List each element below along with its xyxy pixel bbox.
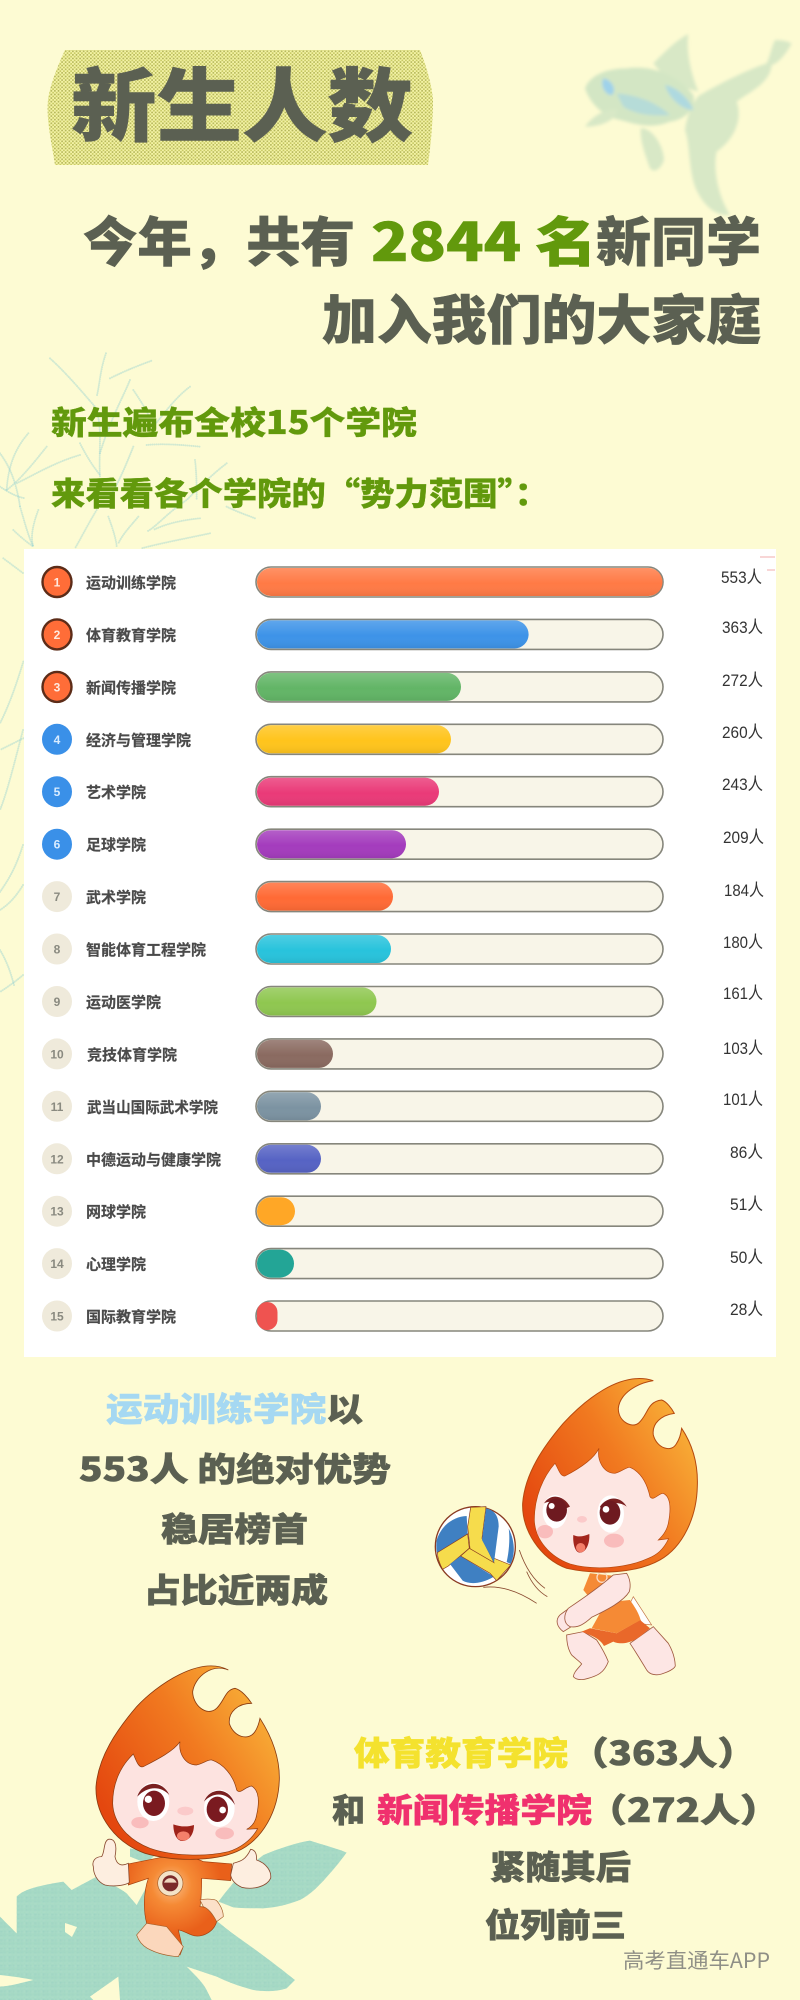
row 3: 新闻传播学院 272人: 3 xyxy=(54,680,61,694)
row 5: 艺术学院 243人: 243人 xyxy=(722,775,763,794)
row 15: 国际教育学院 28人 xyxy=(42,1300,763,1332)
white side stripe xyxy=(630,1597,652,1625)
row 4: 经济与管理学院 260人: 260人 xyxy=(722,723,763,742)
callout line: 和 新闻传播学院（272人） xyxy=(332,1784,780,1832)
row 9: 运动医学院 161人: 9 xyxy=(54,995,61,1009)
row 1: 运动训练学院 553人 xyxy=(42,567,762,597)
row 13: 网球学院 51人: 13 xyxy=(50,1205,64,1219)
row 13: 网球学院 51人 xyxy=(42,1195,763,1227)
arms xyxy=(557,1573,630,1632)
callout line: 占比近两成: 占比近两成 xyxy=(144,1564,328,1612)
row 10: 竞技体育学院 103人: 10 xyxy=(50,1047,64,1061)
row 12: 中德运动与健康学院 86人: 86人 xyxy=(730,1143,763,1162)
row 15: 国际教育学院 28人: 28人 xyxy=(730,1300,763,1319)
decoration: goldfish xyxy=(585,34,792,215)
row 9: 运动医学院 161人: 161人 xyxy=(723,984,763,1003)
row 4: 经济与管理学院 260人: 经济与管理学院 xyxy=(86,729,191,750)
row 11: 武当山国际武术学院 101人: 101人 xyxy=(723,1090,763,1109)
mascot: thumbs-up flame xyxy=(93,1666,279,1957)
row 12: 中德运动与健康学院 86人 xyxy=(42,1143,763,1174)
row 4: 经济与管理学院 260人: 4 xyxy=(54,733,61,747)
callout line: 稳居榜首: 稳居榜首 xyxy=(161,1503,308,1551)
callout line: 和 新闻传播学院（272人）: 新闻传播学院 xyxy=(377,1784,592,1832)
headline line 1: 新同学 xyxy=(596,201,761,277)
row 1: 运动训练学院 553人: 553人 xyxy=(721,568,762,587)
row 3: 新闻传播学院 272人: 272人 xyxy=(722,671,763,690)
row 13: 网球学院 51人: 网球学院 xyxy=(86,1201,146,1222)
row 3: 新闻传播学院 272人 xyxy=(42,671,763,702)
face xyxy=(537,1495,627,1553)
row 8: 智能体育工程学院 180人: 180人 xyxy=(723,933,763,952)
subheading 1: 新生遍布全校15个学院 xyxy=(51,398,417,444)
feet xyxy=(137,1923,183,1957)
callout line: 体育教育学院（363人）: 体育教育学院 xyxy=(354,1727,568,1775)
badge xyxy=(158,1871,183,1896)
row 10: 竞技体育学院 103人: 103人 xyxy=(723,1039,763,1058)
row 14: 心理学院 50人 xyxy=(42,1248,763,1279)
row 2: 体育教育学院 363人 xyxy=(42,618,763,649)
hands xyxy=(93,1839,129,1886)
panel: college ranking chart xyxy=(24,549,776,1357)
row 14: 心理学院 50人: 14 xyxy=(50,1257,64,1271)
row 12: 中德运动与健康学院 86人: 中德运动与健康学院 xyxy=(86,1149,221,1170)
callout line: 体育教育学院（363人） xyxy=(354,1727,756,1775)
heading text: 新生人数 xyxy=(71,43,413,159)
row 5: 艺术学院 243人 xyxy=(42,775,763,807)
row 10: 竞技体育学院 103人 xyxy=(42,1038,763,1069)
leaf notch xyxy=(65,1923,77,1937)
callout text: 运动训练学院 xyxy=(79,1383,391,1612)
headline line 2: 加入我们的大家庭 xyxy=(322,279,761,355)
row 7: 武术学院 184人: 武术学院 xyxy=(86,887,146,908)
row 10: 竞技体育学院 103人: 竞技体育学院 xyxy=(87,1044,177,1065)
callout line: 和 新闻传播学院（272人）: （272人） xyxy=(587,1784,780,1832)
face xyxy=(131,1782,235,1841)
row 9: 运动医学院 161人: 运动医学院 xyxy=(86,992,161,1012)
row 6: 足球学院 209人: 209人 xyxy=(723,828,764,847)
leaf decoration behind mascot xyxy=(0,1841,347,2000)
row 2: 体育教育学院 363人: 体育教育学院 xyxy=(86,624,176,645)
volleyball xyxy=(435,1507,515,1587)
row 15: 国际教育学院 28人: 国际教育学院 xyxy=(86,1306,176,1327)
callout text: 体育教育学院 and 新闻传播学院 xyxy=(332,1727,780,1947)
row 2: 体育教育学院 363人: 2 xyxy=(54,628,61,642)
headline line 1 xyxy=(83,201,761,277)
row 7: 武术学院 184人: 7 xyxy=(54,890,61,904)
row 9: 运动医学院 161人 xyxy=(42,984,763,1017)
callout line: 紧随其后: 紧随其后 xyxy=(490,1841,631,1889)
row 11: 武当山国际武术学院 101人 xyxy=(42,1090,763,1122)
callout line: 553人: 553人 的绝对优势 xyxy=(79,1443,391,1491)
row 11: 武当山国际武术学院 101人: 武当山国际武术学院 xyxy=(87,1096,218,1117)
decoration: bamboo leaves lower xyxy=(0,730,23,992)
row 6: 足球学院 209人: 6 xyxy=(54,838,61,852)
row 11: 武当山国际武术学院 101人: 11 xyxy=(51,1100,64,1114)
row 8: 智能体育工程学院 180人: 智能体育工程学院 xyxy=(86,939,206,960)
callout line: 体育教育学院（363人）: （363人） xyxy=(570,1727,756,1775)
legs xyxy=(567,1627,675,1680)
headline line 1: 今年，共有 xyxy=(83,201,355,277)
row 13: 网球学院 51人: 51人 xyxy=(730,1195,763,1214)
row 14: 心理学院 50人: 50人 xyxy=(730,1248,763,1267)
mascot: volleyball player xyxy=(435,1379,697,1680)
decoration: bamboo leaves xyxy=(0,353,255,750)
row 15: 国际教育学院 28人: 15 xyxy=(50,1310,64,1324)
row 1: 运动训练学院 553人: 1 xyxy=(54,576,61,590)
row 7: 武术学院 184人 xyxy=(42,881,764,912)
row 7: 武术学院 184人: 184人 xyxy=(724,881,764,900)
row 5: 艺术学院 243人: 5 xyxy=(54,785,61,799)
row 1: 运动训练学院 553人: 运动训练学院 xyxy=(86,572,176,593)
row 4: 经济与管理学院 260人 xyxy=(42,723,763,755)
row 6: 足球学院 209人 xyxy=(42,828,764,860)
vest xyxy=(592,1600,641,1633)
callout text: 运动训练学院: 运动训练学院 以 xyxy=(106,1383,363,1431)
row 6: 足球学院 209人: 足球学院 xyxy=(86,834,146,855)
row 5: 艺术学院 243人: 艺术学院 xyxy=(86,782,146,803)
row 8: 智能体育工程学院 180人: 8 xyxy=(54,942,61,956)
row 3: 新闻传播学院 272人: 新闻传播学院 xyxy=(86,677,176,698)
row 2: 体育教育学院 363人: 363人 xyxy=(722,618,763,637)
row 8: 智能体育工程学院 180人 xyxy=(42,933,763,964)
body xyxy=(128,1857,232,1955)
highlighted number: 2844 名 xyxy=(371,201,597,277)
watermark: 高考直通车APP xyxy=(623,1945,770,1975)
callout line: 位列前三: 位列前三 xyxy=(485,1899,626,1947)
flame head xyxy=(523,1379,697,1572)
shorts xyxy=(582,1620,650,1646)
subheading 2: 来看看各个学院的“势力范围”： xyxy=(51,469,549,515)
callout line: 和 新闻传播学院（272人）: 和 xyxy=(332,1784,365,1832)
row 12: 中德运动与健康学院 86人: 12 xyxy=(50,1152,64,1166)
flame head xyxy=(96,1666,279,1859)
heading box: 新生人数 xyxy=(48,43,433,165)
row 14: 心理学院 50人: 心理学院 xyxy=(86,1254,146,1275)
